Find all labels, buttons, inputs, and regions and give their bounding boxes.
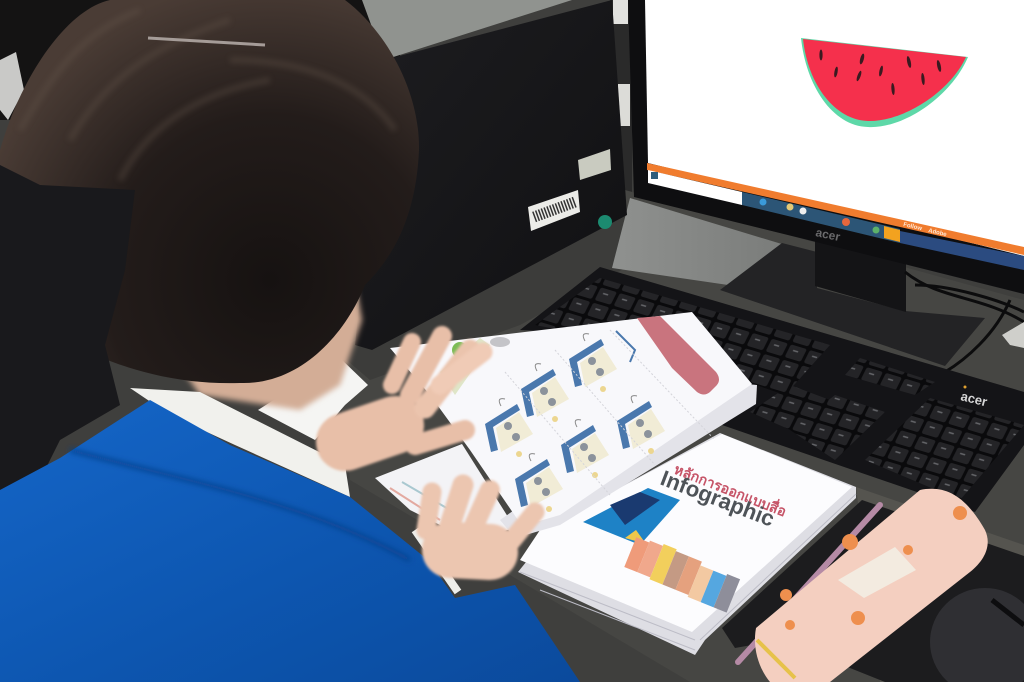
upper booklet page <box>390 312 757 538</box>
seeds <box>819 50 942 95</box>
page tab <box>490 337 510 347</box>
neck <box>175 280 362 410</box>
monitor screen <box>645 0 1024 256</box>
cables <box>905 272 1024 372</box>
tower stickers <box>528 149 612 231</box>
pencil <box>738 505 880 662</box>
monitor logo: acer <box>814 225 842 244</box>
hair clip <box>148 38 265 45</box>
monitor bezel <box>628 0 1024 294</box>
underlying sheet <box>375 444 515 540</box>
lower hand <box>426 485 535 555</box>
page header label <box>637 316 719 394</box>
cuff <box>415 530 458 592</box>
blue jacket <box>0 400 580 682</box>
booklet heading: Infographic <box>657 465 778 532</box>
green badge <box>440 338 490 395</box>
jacket fold <box>70 450 410 560</box>
software interface strip: Follow <box>903 222 923 232</box>
software interface strip <box>647 163 1024 270</box>
page tile connector <box>616 331 635 362</box>
hair <box>0 0 419 383</box>
monitor <box>628 0 1024 372</box>
colored bars <box>623 534 742 613</box>
white notebook <box>258 358 368 440</box>
keyboard logo: acer <box>959 388 989 409</box>
page illustrations <box>485 334 665 512</box>
hair bow <box>0 165 135 490</box>
software interface strip: Adobe <box>928 228 948 238</box>
computer tower <box>355 0 627 350</box>
hair highlights <box>20 10 395 180</box>
keyboard keys <box>535 278 830 395</box>
page fine lines <box>505 330 715 495</box>
case label <box>838 547 916 598</box>
booklet picture <box>583 488 742 613</box>
monitor stand <box>720 238 985 366</box>
collar <box>130 388 350 497</box>
desk surface <box>335 190 1024 682</box>
lower booklet <box>518 433 856 655</box>
watermelon <box>801 38 968 127</box>
mouse pad <box>722 500 1024 682</box>
booklet heading thai: หลักการออกแบบสื่อ <box>672 459 789 519</box>
computer mouse <box>930 588 1024 682</box>
hair and head <box>0 0 419 497</box>
case flowers <box>780 506 967 630</box>
upper hand <box>345 336 483 445</box>
keyboard <box>520 267 1024 512</box>
pencil case <box>755 489 988 682</box>
booklet page edges <box>520 494 856 650</box>
